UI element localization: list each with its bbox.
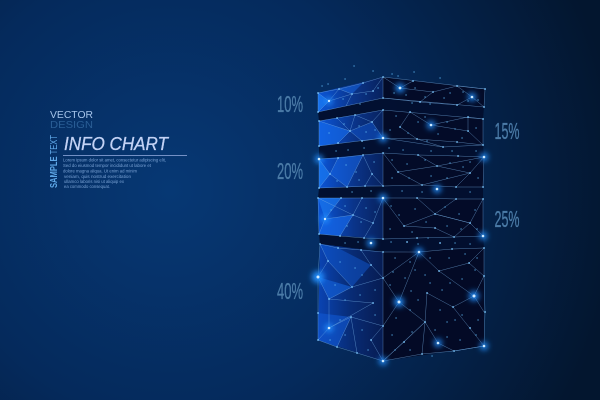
title: info chart: INFO CHART [64,134,170,154]
scattered particles [322,66,478,356]
heading: vector design: VECTOR [50,110,93,121]
percent labels: 40% [277,278,303,304]
percent labels: 15% [494,118,520,144]
paragraph: Sed do eiusmod tempor incididunt ut labore et [63,163,152,169]
segment 25% [318,198,483,239]
segment 10% [318,77,485,112]
percent labels: 25% [494,206,520,232]
vertical label: sample text: SAMPLE TEXT [48,135,60,188]
segment 20% [319,153,484,188]
paragraph: ea commodo consequat. [64,184,110,190]
column: stacked segments [312,66,488,365]
percent labels: 10% [277,91,303,117]
glow cores [316,87,485,362]
paragraph: ullamco laboris nisi ut aliquip ex [64,179,125,185]
percent labels [277,91,520,304]
title rule [63,154,187,157]
paragraph: dolore magna aliqua. Ut enim ad minim [63,168,137,174]
paragraph: Lorem ipsum dolor sit amet, consectetur adipiscing elit, [63,158,166,164]
glows [312,84,488,365]
heading: vector design: DESIGN [50,120,93,131]
gap shadows [318,98,484,252]
nodes [318,77,485,354]
segment 15% [319,110,483,147]
paragraph: veniam, quis nostrud exercitation [64,174,131,180]
segment 40% [318,244,485,361]
paragraph [63,158,166,190]
heading: vector design [50,110,93,131]
percent labels: 20% [277,158,303,184]
